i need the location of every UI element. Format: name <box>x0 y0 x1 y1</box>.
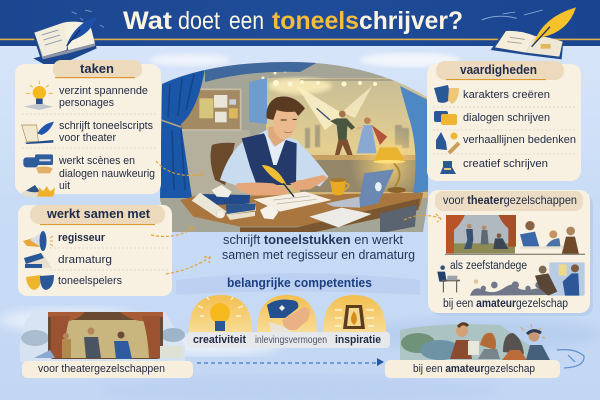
image: theatre company on stage <box>20 310 185 362</box>
title: doet <box>178 7 220 35</box>
icon: character masks <box>434 85 459 104</box>
icon: stacked scripts <box>24 253 52 268</box>
text: schrijft toneelscripts voor theater <box>59 120 153 144</box>
text: werkt scenes en dialogen nauwkeurig uit <box>58 155 155 192</box>
back wall <box>160 62 428 232</box>
text: schrijft toneelscripts voor theater: schrijft toneelscripts <box>59 120 153 132</box>
heading: vaardigheden: vaardigheden <box>460 63 537 77</box>
heading: voor theatergezelschappen <box>435 191 583 211</box>
arrow: illustration to theatre panel <box>404 214 441 222</box>
right curtain <box>400 86 428 195</box>
vest <box>242 133 297 185</box>
lights string <box>262 72 377 86</box>
stage backdrop <box>266 78 431 198</box>
title <box>123 7 463 35</box>
stage performers <box>317 108 387 155</box>
competency: creativiteit <box>189 295 252 332</box>
icon: theatre masks <box>26 275 54 290</box>
heading: voor theatergezelschappen: voor theatergezelschappen <box>443 193 577 207</box>
quill <box>262 165 287 185</box>
heading: taken <box>53 60 142 78</box>
icon: ship and crown <box>22 185 55 197</box>
lamp glow <box>354 132 416 193</box>
competency labels <box>187 332 390 348</box>
icon: pen and scroll <box>436 132 459 153</box>
arrow: regisseur to caption <box>151 227 194 236</box>
icon: typewriter <box>440 161 456 174</box>
title: Wat <box>123 7 173 35</box>
caption: central description: samen met regisseur en dramaturg <box>222 248 415 262</box>
hair <box>266 96 305 120</box>
caption: bij een amateurgezelschap: bij een amateurgezelschap <box>413 363 535 375</box>
flourish: blue swirl <box>557 350 584 368</box>
panel: voor theatergezelschappen <box>428 190 593 316</box>
central illustration: writer at desk <box>160 62 428 232</box>
text: verzint spannende personages <box>59 85 148 109</box>
neck and face <box>268 127 285 147</box>
image: rehearsal on stage <box>445 215 585 255</box>
text: verzint spannende personages: verzint spannende <box>59 85 148 97</box>
text: werkt scenes en dialogen nauwkeurig uit: dialogen nauwkeurig <box>59 168 155 180</box>
icon: light bulb on book <box>24 81 53 110</box>
competency labels: inlevingsvermogen <box>255 335 327 346</box>
header band <box>0 0 600 46</box>
text: bij een amateurgezelschap: bij een amateurgezelschap <box>443 298 568 310</box>
panel: werkt samen met <box>18 205 172 296</box>
text: schrijft toneelscripts voor theater: voor theater <box>59 132 116 144</box>
heading: taken: taken <box>80 62 114 76</box>
text: werkt scenes en dialogen nauwkeurig uit: werkt scènes en <box>58 155 135 167</box>
panel: taken <box>15 60 161 197</box>
text: dramaturg: dramaturg <box>58 254 112 266</box>
text: dialogen schrijven: dialogen schrijven <box>463 112 550 124</box>
caption: voor theatergezelschappen: voor theatergezelschappen <box>38 363 165 375</box>
text: verhaallijnen bedenken: verhaallijnen bedenken <box>463 134 576 146</box>
competency: inspiratie <box>323 295 386 332</box>
icon: dialogue bubbles <box>434 111 457 125</box>
text: karakters creeren: karakters creëren <box>463 89 550 101</box>
caption: bij een amateurgezelschap <box>385 360 560 378</box>
stage floor <box>311 155 416 160</box>
icon: speech bubbles <box>23 154 53 173</box>
caption: voor theatergezelschappen <box>22 361 193 378</box>
stage lights glow <box>268 78 400 130</box>
image: amateur company <box>400 324 551 360</box>
loose paper <box>309 208 372 227</box>
distant ensemble <box>305 125 409 148</box>
hands <box>236 182 288 196</box>
competency: inlevingsvermogen <box>257 295 317 332</box>
notebook <box>253 192 332 212</box>
caption: central description: schrijft toneelstukken en werkt <box>223 233 404 247</box>
stone wall shading <box>175 130 250 195</box>
title: toneels <box>272 7 359 35</box>
desk <box>180 192 424 232</box>
icon: open book with blue quill <box>33 10 104 67</box>
lamp <box>393 163 400 187</box>
heading: vaardigheden <box>436 61 564 80</box>
crumpled paper <box>212 185 232 197</box>
valance <box>205 61 318 82</box>
cup <box>330 180 346 195</box>
icon: book and quill <box>22 122 54 144</box>
title: een <box>229 7 264 35</box>
title: chrijver? <box>359 7 463 35</box>
band: belangrijke competenties: belangrijke competenties <box>227 275 372 290</box>
chair <box>211 143 235 185</box>
competency labels: inspiratie <box>335 334 381 346</box>
laptop <box>358 169 394 208</box>
noticeboard <box>177 89 241 130</box>
text: regisseur: regisseur <box>58 232 106 244</box>
heading: werkt samen met <box>30 205 165 225</box>
image: writer, audience and performers <box>437 262 585 296</box>
text: toneelspelers: toneelspelers <box>58 275 122 287</box>
panel: vaardigheden <box>427 61 581 181</box>
arrow: blue dashed to amateur company <box>197 358 384 366</box>
books <box>200 194 250 205</box>
icon: open book with yellow quill <box>482 7 576 59</box>
arrow: taken to illustration <box>156 161 203 178</box>
text: creatief schrijven: creatief schrijven <box>463 158 548 170</box>
text: verzint spannende personages: personages <box>59 97 114 109</box>
icon: megaphone <box>23 231 53 251</box>
desk items <box>192 147 406 227</box>
heading: werkt samen met: werkt samen met <box>46 207 151 221</box>
caption: central description <box>222 233 415 262</box>
arrow: toneelspelers to caption <box>166 257 210 274</box>
text: als zeefstandege: als zeefstandege <box>450 260 527 272</box>
rolled scripts <box>192 193 227 218</box>
writer <box>220 96 328 197</box>
shirt and arms <box>220 130 328 187</box>
inner drape <box>249 78 267 124</box>
band: belangrijke competenties <box>176 273 420 295</box>
text: werkt scenes en dialogen nauwkeurig uit: uit <box>59 180 70 192</box>
competency labels: creativiteit <box>193 334 246 346</box>
left curtain <box>160 68 205 198</box>
collar <box>264 130 287 165</box>
